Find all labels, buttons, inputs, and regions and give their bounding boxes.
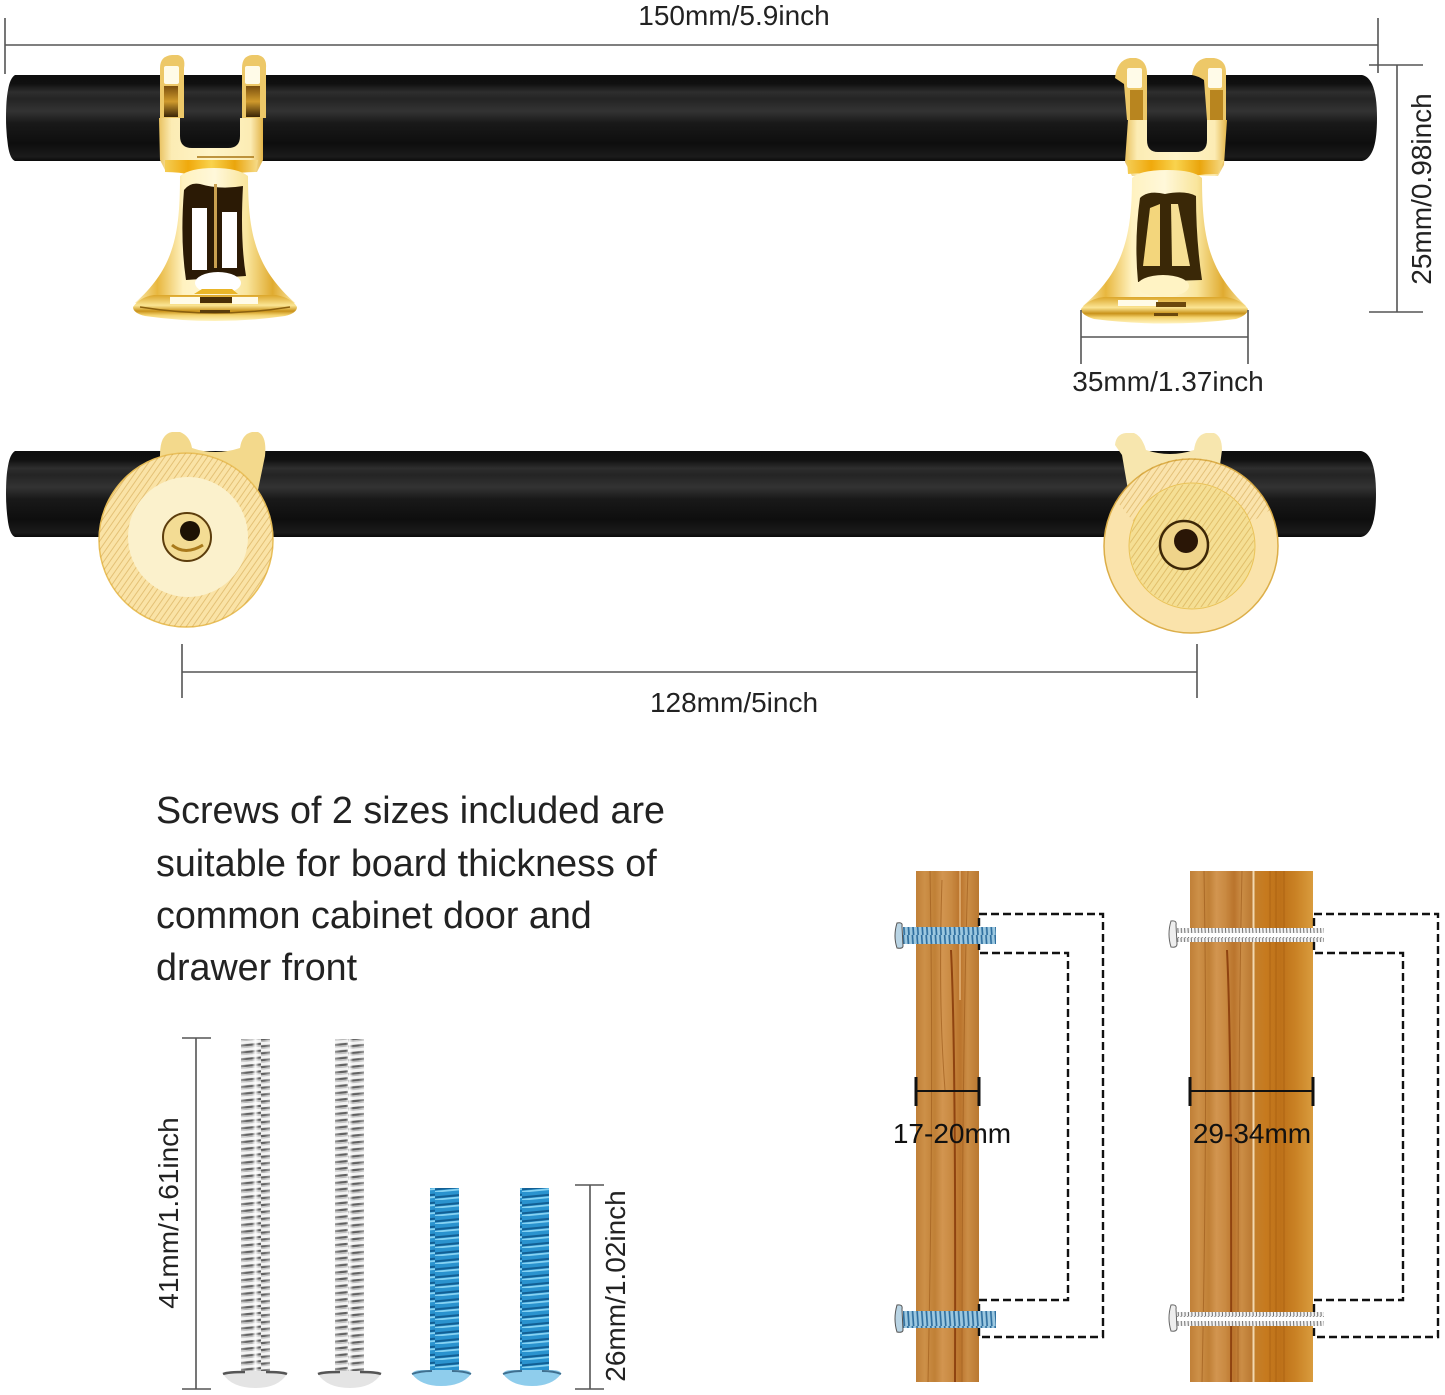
dimension: hole spacing 128mm: 128mm/5inch (650, 687, 818, 718)
dimension: base diameter 35mm (1072, 310, 1264, 397)
thickness marker 29-34mm: 29-34mm (1193, 1118, 1311, 1149)
screw description text: common cabinet door and (156, 894, 592, 936)
dimension: short screw 26mm: 26mm/1.02inch (600, 1190, 631, 1382)
dashed handle outline, thin board (979, 914, 1103, 1337)
thin board installation diagram (893, 871, 1103, 1382)
thickness marker 29-34mm (1190, 1077, 1313, 1149)
screw description text (156, 789, 665, 988)
screw description text: drawer front (156, 946, 358, 988)
left bracket (160, 432, 265, 490)
black bar, back view (6, 451, 1376, 537)
dimension: long screw 41mm: 41mm/1.61inch (153, 1117, 184, 1309)
left gold post (133, 55, 297, 321)
thickness marker 17-20mm: 17-20mm (893, 1118, 1011, 1149)
thick board installation diagram (1169, 871, 1438, 1382)
dimension: height 25mm (1369, 65, 1437, 312)
dimension: long screw 41mm (153, 1038, 211, 1389)
long silver screw 2 (318, 1039, 381, 1388)
blue screw, top (895, 923, 996, 948)
right bracket (1115, 433, 1222, 490)
left mounting disc (99, 453, 273, 627)
dimension: height 25mm: 25mm/0.98inch (1406, 93, 1437, 285)
silver screw, bottom (1169, 1305, 1324, 1331)
thickness marker 17-20mm (893, 1077, 1011, 1149)
wood board 29-34mm (1190, 871, 1313, 1382)
black bar, side view (6, 75, 1377, 161)
wood board 17-20mm (916, 871, 979, 1382)
right gold post (1081, 58, 1248, 324)
blue screw, bottom (895, 1305, 996, 1332)
dashed handle outline, thick board (1314, 914, 1438, 1337)
right mounting disc (1104, 458, 1278, 633)
handle side view (6, 55, 1377, 324)
handle back view (6, 432, 1376, 633)
dimension: overall length 150mm: 150mm/5.9inch (638, 0, 830, 31)
dimension: base diameter 35mm: 35mm/1.37inch (1072, 366, 1264, 397)
dimension: short screw 26mm (575, 1185, 631, 1389)
screw description text: Screws of 2 sizes included are (156, 789, 665, 831)
short blue screw 1 (412, 1188, 471, 1386)
screw description text: suitable for board thickness of (156, 842, 657, 884)
dimension: hole spacing 128mm (182, 644, 1197, 718)
dimension: overall length 150mm (5, 0, 1378, 74)
silver screw, top (1169, 921, 1324, 947)
short blue screw 2 (503, 1188, 561, 1386)
long silver screw 1 (223, 1039, 287, 1388)
